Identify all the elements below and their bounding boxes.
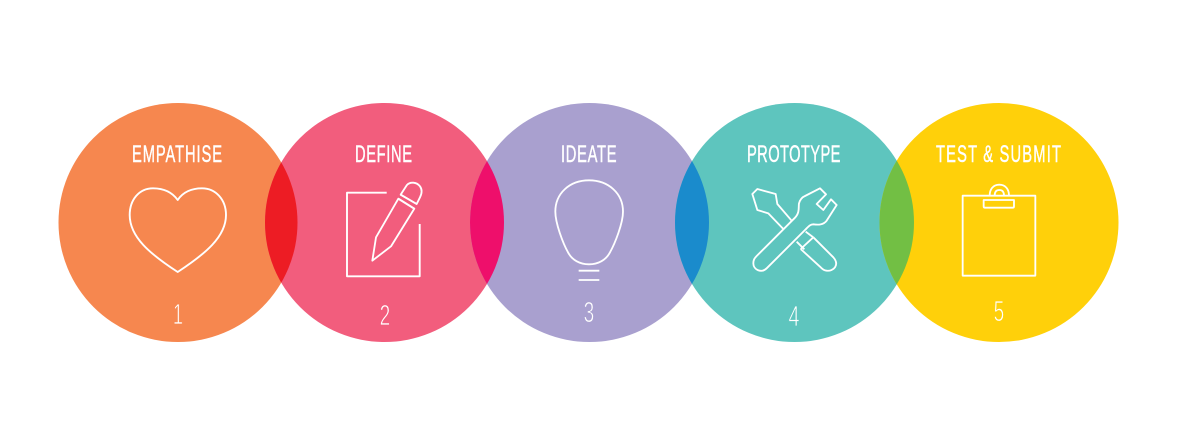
circle: define <box>265 103 504 342</box>
circle: empathise <box>58 103 298 342</box>
number 4: 4 <box>789 301 800 333</box>
overlap: define and ideate <box>470 161 504 284</box>
number 1: 1 <box>173 299 183 331</box>
overlap: ideate and prototype <box>675 161 709 284</box>
heading: empathise: EMPATHISE <box>132 141 222 168</box>
icon: pencil and paper <box>347 183 422 276</box>
icon: clipboard <box>963 185 1035 276</box>
icon: crossed tools <box>752 188 837 271</box>
infographic: five overlapping stage circles <box>58 103 1118 342</box>
circle: ideate <box>470 103 709 342</box>
circle: prototype <box>675 103 914 342</box>
number 3: 3 <box>584 297 594 329</box>
heading: prototype: PROTOTYPE <box>747 141 840 168</box>
overlap: prototype and test <box>880 160 914 284</box>
overlap: empathise and define <box>265 162 298 283</box>
number 2: 2 <box>380 300 390 332</box>
heading: test and submit: TEST & SUBMIT <box>936 141 1061 168</box>
heading: ideate: IDEATE <box>561 141 617 168</box>
icon: heart <box>130 188 226 272</box>
circle: test and submit <box>880 103 1118 342</box>
number 5: 5 <box>994 296 1004 328</box>
heading: define: DEFINE <box>355 141 412 168</box>
icon: light bulb <box>555 180 623 280</box>
